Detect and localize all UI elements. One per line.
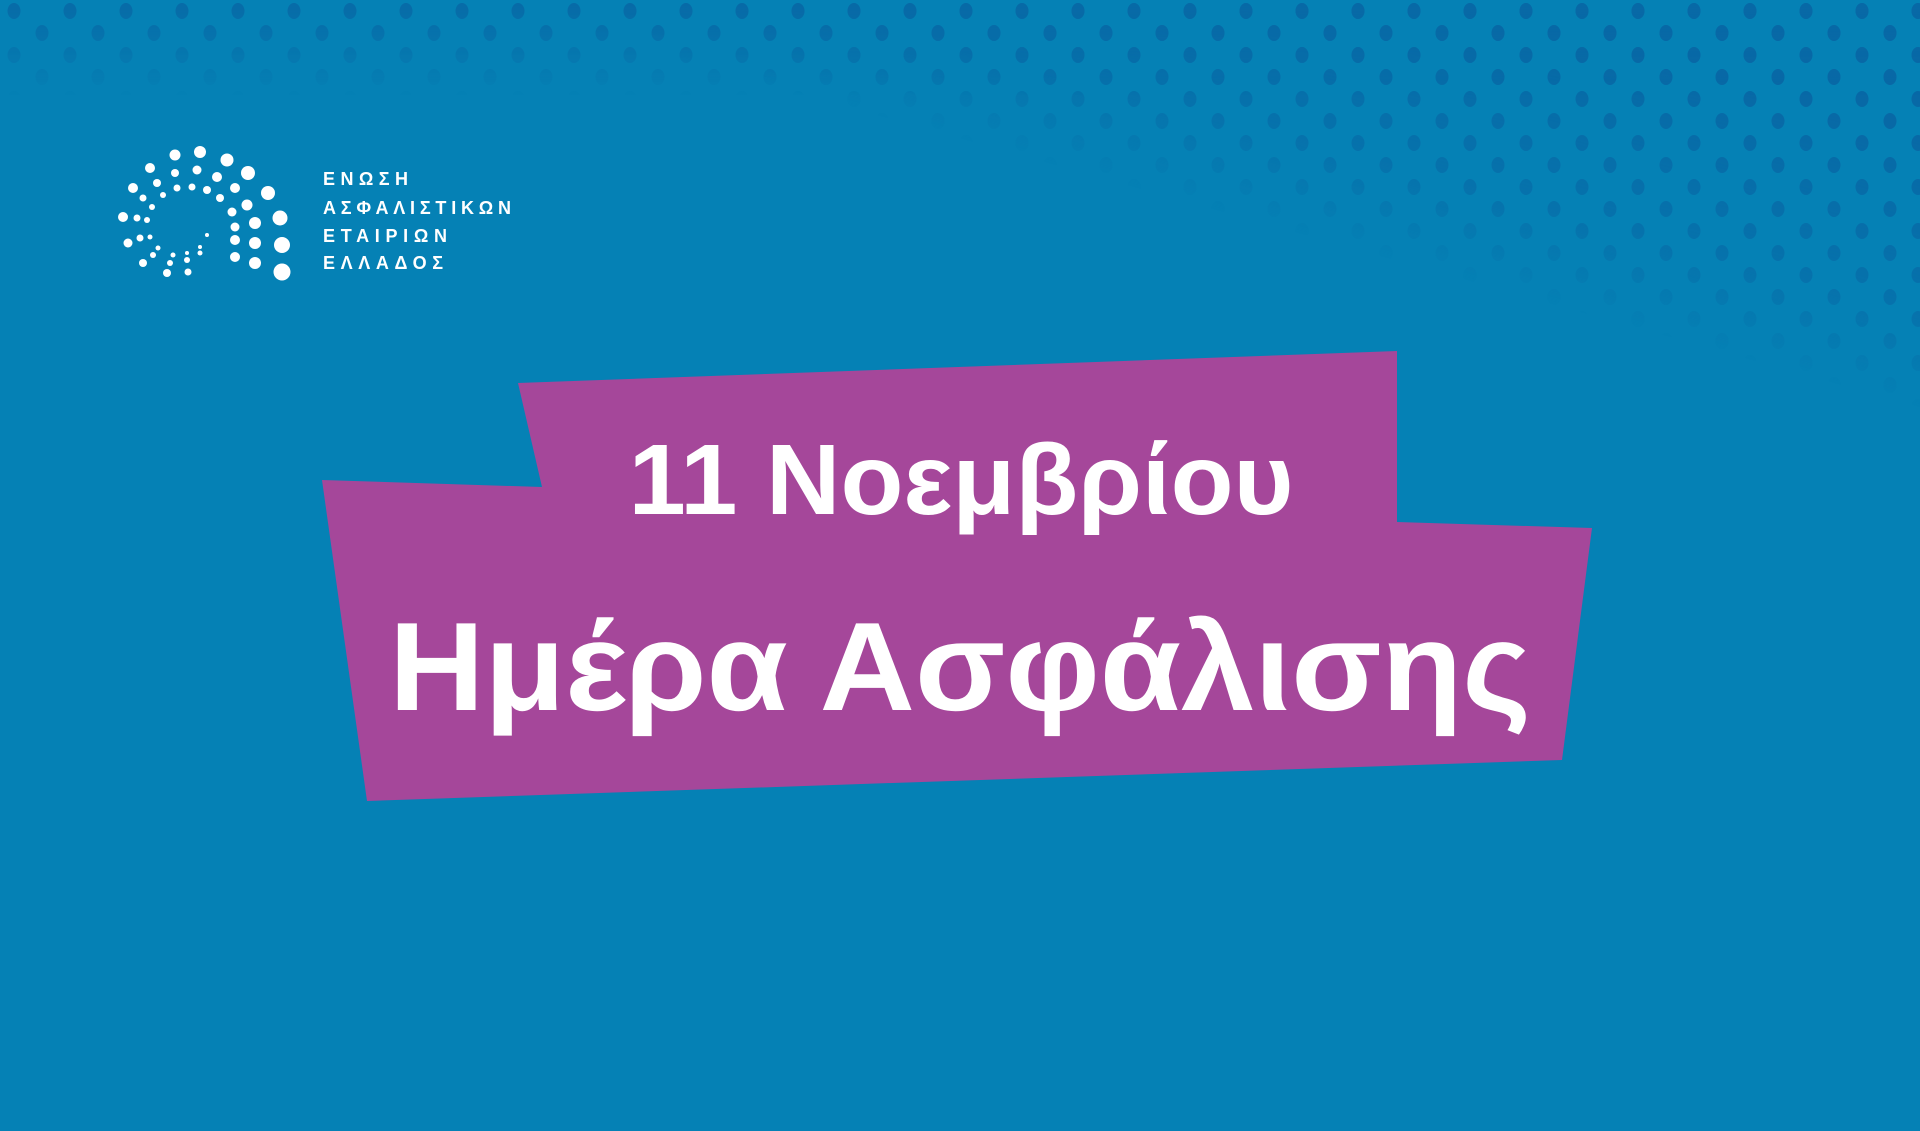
logo text: ΕΝΩΣΗ bbox=[323, 169, 408, 189]
icon: dotted arc logo mark bbox=[118, 146, 290, 280]
logo text: ΑΣΦΑΛΙΣΤΙΚΩΝ bbox=[323, 198, 511, 218]
logo text: ΕΤΑΙΡΙΩΝ bbox=[323, 226, 447, 246]
logo text bbox=[323, 169, 511, 273]
banner: purple title shape bbox=[322, 351, 1592, 801]
title line 1: date: 11 Νοεμβρίου bbox=[628, 424, 1294, 536]
title line 2: Ημέρα Ασφάλισης bbox=[389, 596, 1531, 737]
logo text: ΕΛΛΑΔΟΣ bbox=[323, 253, 443, 273]
logo bbox=[118, 146, 511, 280]
background halftone pattern bbox=[8, 3, 1920, 347]
